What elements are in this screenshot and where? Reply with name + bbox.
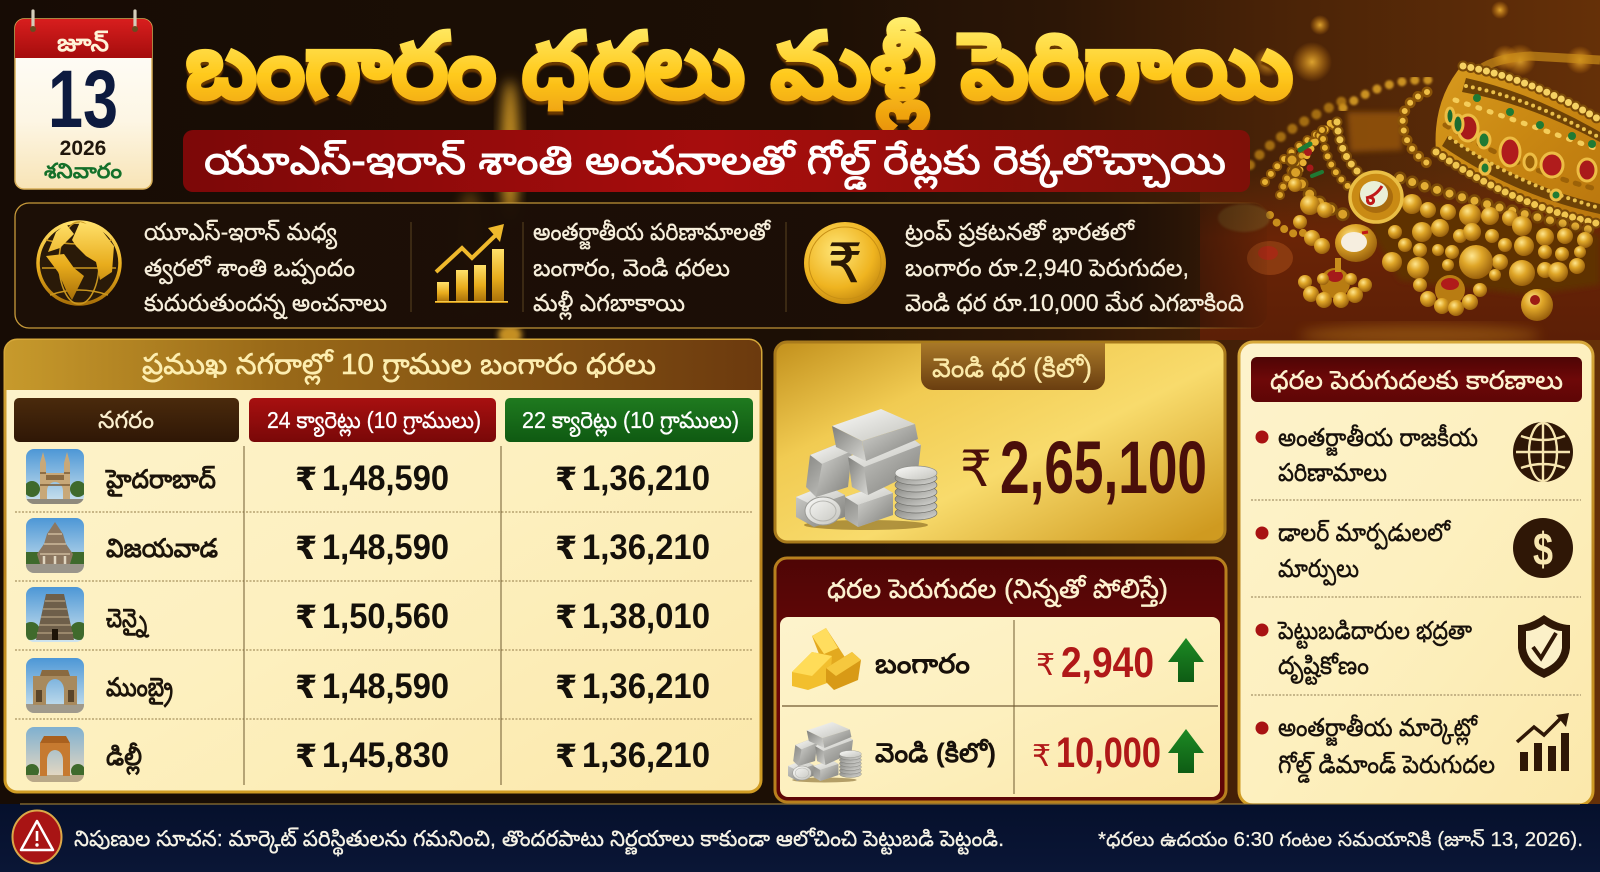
icon: rupee coin: ₹ xyxy=(828,234,862,294)
column header: 24 carat xyxy=(249,398,496,442)
jewelry photo xyxy=(1200,56,1600,345)
increases heading: ధరల పెరుగుదల (నిన్నతో పోలిస్తే) xyxy=(827,574,1168,608)
text: peace deal expectations: కుదురుతుందన్న అంచనాలు xyxy=(144,290,387,320)
column header: 22 carat xyxy=(505,398,753,442)
silver price value: 2,65,100 xyxy=(1000,426,1207,509)
info strip panel xyxy=(15,203,1267,328)
footnote: *ధరలు ఉదయం 6:30 గంటల సమయానికి (జూన్ 13, 2026). xyxy=(1098,829,1583,851)
reason: geopolitics: పరిణామాలు xyxy=(1278,459,1387,487)
reason: geopolitics xyxy=(1256,422,1573,487)
icon: Gateway of India xyxy=(26,658,84,713)
row: gold increase: 2,940 xyxy=(1061,639,1154,687)
row: Delhi: 1,36,210 xyxy=(582,736,710,775)
icon: golden globe xyxy=(38,222,120,304)
icon: India Gate xyxy=(25,727,85,782)
row: Chennai: 1,38,010 xyxy=(582,597,710,636)
icon: dollar: $ xyxy=(1533,523,1553,575)
reason: dollar: డాలర్ మార్పడులలో xyxy=(1278,519,1452,550)
subtitle banner xyxy=(183,130,1250,192)
icon: shield xyxy=(1518,615,1570,678)
icon: rupee coin xyxy=(804,222,886,304)
row: Chennai: ₹ xyxy=(295,599,317,635)
silver price value xyxy=(960,426,1207,509)
icon: gold bars xyxy=(792,628,861,690)
text: international developments xyxy=(533,219,771,320)
text: international developments: అంతర్జాతీయ పరిణామాలతో xyxy=(533,219,771,250)
subtitle banner: యూఎస్-ఇరాన్ శాంతి అంచనాలతో గోల్డ్ రేట్లకు రెక్కలొచ్చాయి xyxy=(204,139,1226,190)
icon: up arrow xyxy=(1168,729,1204,773)
row: silver increase: 10,000 xyxy=(1056,729,1161,777)
reasons heading xyxy=(1251,357,1582,402)
reason: dollar xyxy=(1256,518,1573,586)
text: Trump announcement: బంగారం రూ.2,940 పెరుగుదల, xyxy=(905,255,1189,282)
icon: growth chart xyxy=(1517,713,1569,771)
row: Vijayawada: 1,48,590 xyxy=(322,528,449,567)
silver price value: ₹ xyxy=(960,441,992,497)
row: silver increase: వెండి (కిలో) xyxy=(875,738,996,768)
icon: globe xyxy=(1513,422,1573,482)
row: Mumbai: ₹ xyxy=(555,669,577,705)
silver price tag xyxy=(921,343,1105,390)
row: Mumbai: ₹ xyxy=(295,669,317,705)
row: Hyderabad: 1,36,210 xyxy=(582,459,710,498)
panel: reasons xyxy=(1239,342,1593,805)
column header: city: నగరం xyxy=(98,407,154,434)
reasons heading: ధరల పెరుగుదలకు కారణాలు xyxy=(1270,365,1563,395)
table heading: ప్రముఖ నగరాల్లో 10 గ్రాముల బంగారం ధరలు xyxy=(142,349,656,385)
reason: investors: దృష్టికోణం xyxy=(1278,652,1369,685)
row: Mumbai xyxy=(26,658,710,713)
panel: city gold rates table xyxy=(5,340,761,792)
row: Mumbai: 1,36,210 xyxy=(582,667,710,706)
row: Delhi: డిల్లీ xyxy=(106,741,142,776)
row: Vijayawada: ₹ xyxy=(555,530,577,566)
row: Hyderabad xyxy=(24,449,710,504)
text: Trump announcement: ట్రంప్ ప్రకటనతో భారతలో xyxy=(905,219,1135,247)
column header: city xyxy=(14,398,239,442)
calendar month: జూన్ xyxy=(57,30,109,57)
reason: geopolitics: అంతర్జాతీయ రాజకీయ xyxy=(1278,424,1478,456)
row: Chennai: 1,50,560 xyxy=(322,597,449,636)
row: Hyderabad: హైదరాబాద్ xyxy=(105,464,216,497)
expert advice text: నిపుణుల సూచన: మార్కెట్ పరిస్థితులను గమనించి, తొందరపాటు నిర్ణయాలు కాకుండా ఆలోచించి పెట్టుబడి పెట్టండి. xyxy=(74,826,1004,857)
row: Hyderabad: 1,48,590 xyxy=(322,459,449,498)
row: Chennai xyxy=(22,587,710,642)
row: Hyderabad: ₹ xyxy=(555,461,577,497)
column header: 24 carat: 24 క్యారెట్లు (10 గ్రాములు) xyxy=(267,407,481,437)
necklace drops and beads xyxy=(1288,178,1600,321)
text: peace deal expectations: యూఎస్-ఇరాన్ మధ్య xyxy=(144,219,337,250)
row: Chennai: ₹ xyxy=(555,599,577,635)
reason: investors xyxy=(1256,615,1570,685)
calendar year: 2026 xyxy=(60,137,106,160)
calendar xyxy=(15,11,152,189)
row: silver increase: ₹ xyxy=(1032,740,1051,773)
title: బంగారం ధరలు మళ్లీ పెరిగాయి xyxy=(186,17,1293,133)
row: gold increase: ₹ xyxy=(1036,649,1055,682)
text: international developments: బంగారం, వెండి ధరలు xyxy=(533,255,730,282)
text: international developments: మళ్లీ ఎగబాకాయి xyxy=(533,290,685,320)
red brooch xyxy=(1218,204,1293,275)
reason: gold demand: గోల్డ్ డిమాండ్ పెరుగుదల xyxy=(1278,751,1495,783)
row: gold increase xyxy=(792,628,1204,690)
panel: silver price xyxy=(775,342,1225,542)
row: Mumbai: ముంబ్రై xyxy=(106,672,173,708)
ornate bangle xyxy=(1436,64,1600,224)
row: Vijayawada xyxy=(26,518,710,573)
icon: dollar xyxy=(1513,518,1573,578)
row: Vijayawada: ₹ xyxy=(295,530,317,566)
row: Vijayawada: 1,36,210 xyxy=(582,528,710,567)
row: silver increase xyxy=(788,722,1204,782)
text: Trump announcement xyxy=(905,219,1244,317)
reason: investors: పెట్టుబడిదారుల భద్రతా xyxy=(1277,617,1472,649)
reason: gold demand xyxy=(1256,713,1569,783)
icon: temple xyxy=(26,518,84,573)
central pendant xyxy=(1335,172,1402,262)
panel: price increases xyxy=(775,558,1226,802)
calendar day: 13 xyxy=(48,54,118,145)
footer bar xyxy=(0,804,1600,872)
row: Hyderabad: ₹ xyxy=(295,461,317,497)
back bangles xyxy=(1250,56,1600,166)
row: Vijayawada: విజయవాడ xyxy=(106,533,218,563)
reason: dollar: మార్పులు xyxy=(1278,555,1359,586)
icon: up arrow xyxy=(1168,638,1204,682)
icon: rising bar chart xyxy=(435,224,508,303)
text: peace deal expectations xyxy=(144,219,387,320)
text: Trump announcement: వెండి ధర రూ.10,000 మేర ఎగబాకింది xyxy=(905,290,1244,317)
column header: 22 carat: 22 క్యారెట్లు (10 గ్రాములు) xyxy=(522,407,739,437)
row: gold increase: బంగారం xyxy=(875,649,970,679)
icon: silver bars xyxy=(796,409,937,530)
text: peace deal expectations: త్వరలో శాంతి ఒప్పందం xyxy=(144,255,355,285)
icon: silver bars small xyxy=(788,722,861,782)
calendar weekday: శనివారం xyxy=(44,160,122,183)
row: Delhi: ₹ xyxy=(295,738,317,774)
icon: gopuram xyxy=(26,587,84,642)
icon: warning xyxy=(12,810,62,864)
row: Delhi: 1,45,830 xyxy=(322,736,449,775)
icon: Charminar xyxy=(24,449,86,504)
row: Chennai: చెన్నై xyxy=(106,603,150,639)
silver price tag: వెండి ధర (కిలో) xyxy=(932,353,1092,383)
reason: gold demand: అంతర్జాతీయ మార్కెట్లో xyxy=(1278,714,1479,746)
row: Delhi xyxy=(25,727,710,782)
row: Mumbai: 1,48,590 xyxy=(322,667,449,706)
necklace chains xyxy=(1265,118,1600,234)
row: Delhi: ₹ xyxy=(555,738,577,774)
